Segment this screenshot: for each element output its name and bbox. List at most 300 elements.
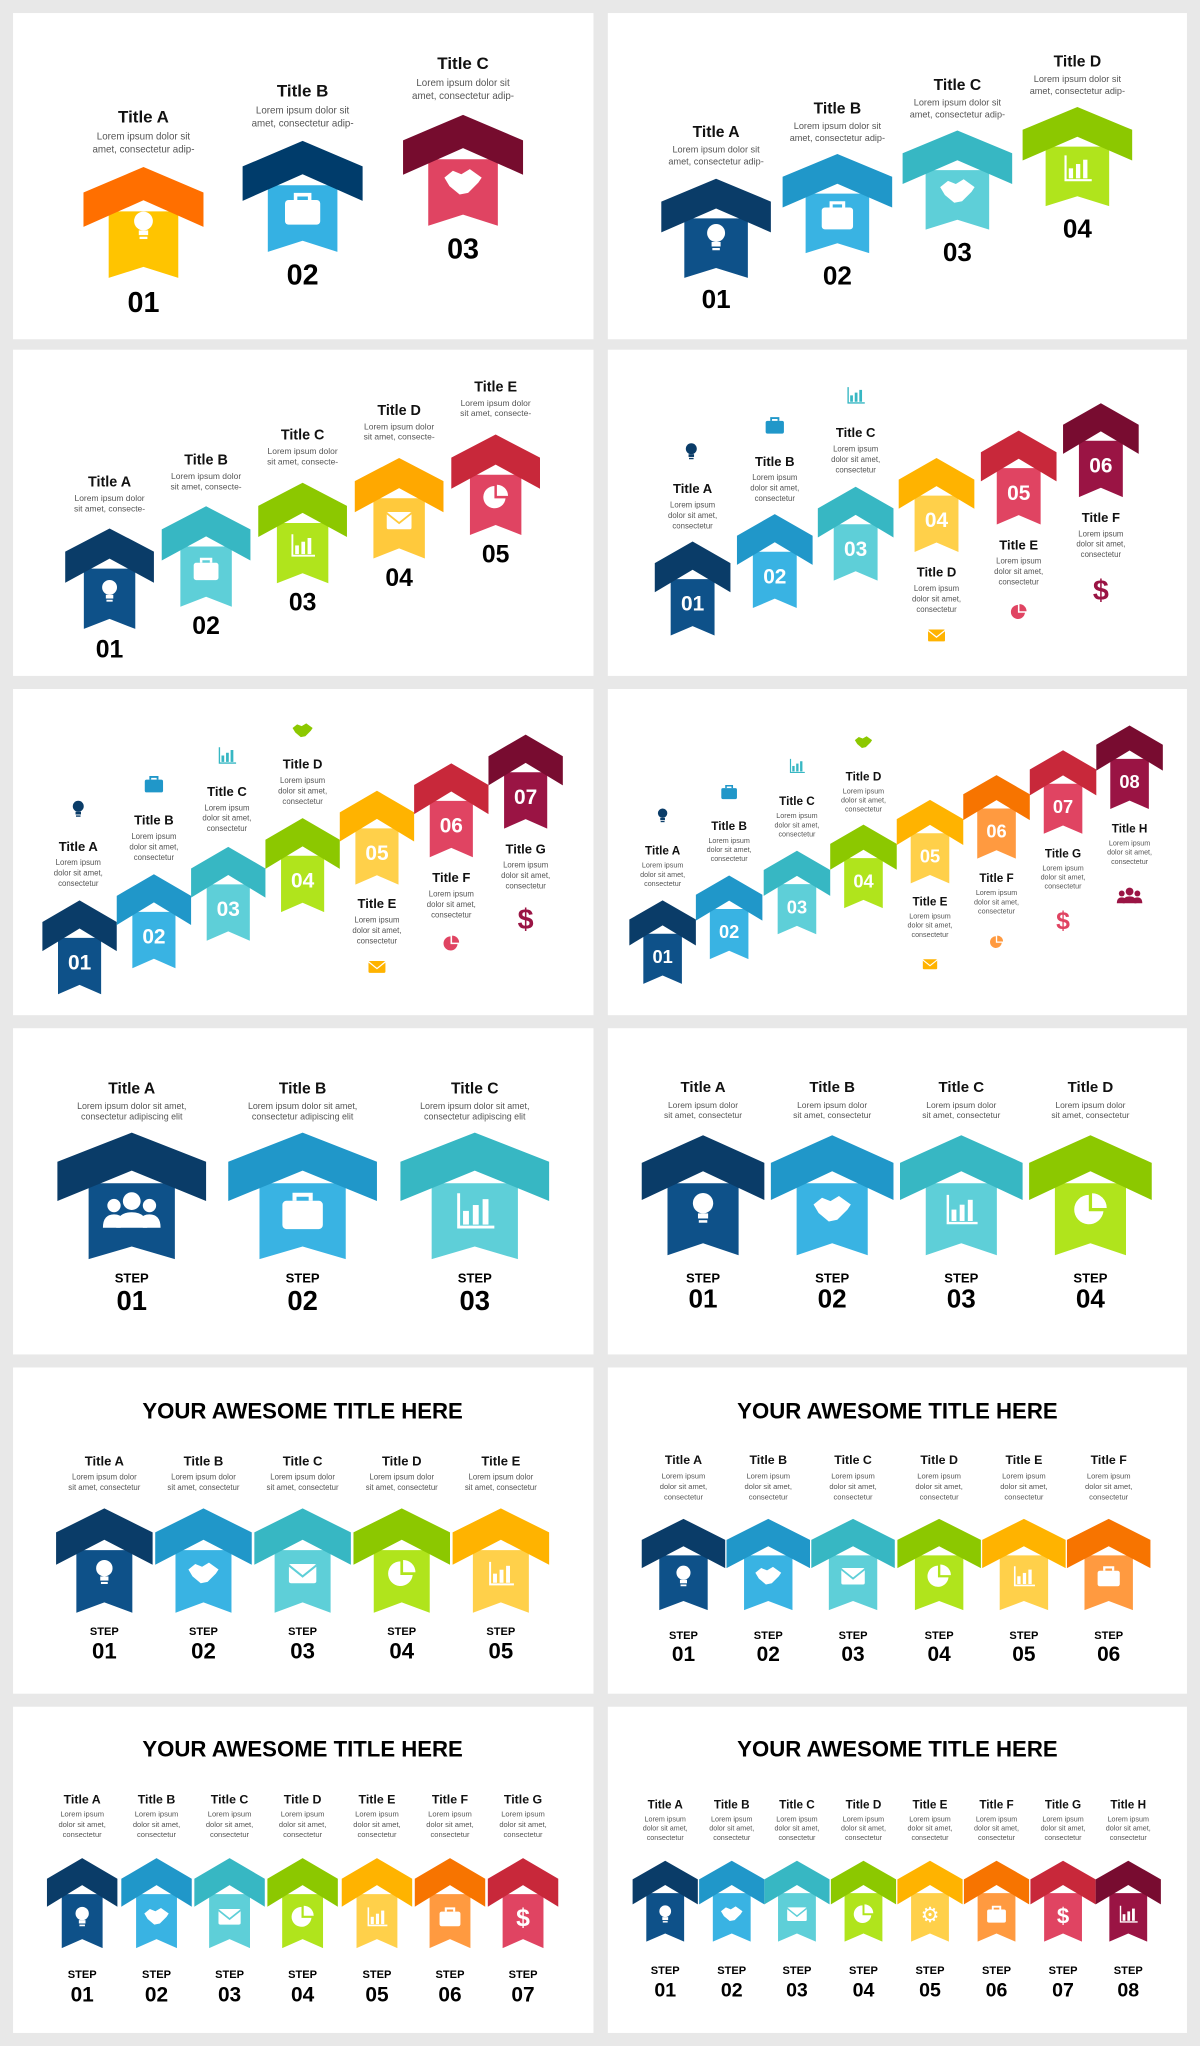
arrow 04 xyxy=(355,458,443,558)
labels panel 11: Lorem ipsum xyxy=(355,1809,399,1818)
heading: YOUR AWESOME TITLE HERE xyxy=(737,1736,1058,1761)
labels panel 10: consectetur xyxy=(834,1492,873,1501)
labels and icons panel 6: dolor sit amet, xyxy=(1107,849,1152,857)
arrow 04: 04 xyxy=(925,509,949,532)
labels panel 1: 02 xyxy=(287,259,319,291)
labels and icons panel 5: Title F xyxy=(432,870,470,885)
labels panel 8: Title B xyxy=(809,1079,855,1096)
arrow 02 xyxy=(243,141,363,252)
labels and icons panel 5: dolor sit amet, xyxy=(54,869,103,878)
labels and icons panel 4: consectetur xyxy=(835,465,876,474)
labels panel 11: 03 xyxy=(218,1984,241,2007)
labels panel 9: STEP xyxy=(90,1626,119,1638)
step 01 xyxy=(56,1508,153,1613)
arrow 03: 03 xyxy=(787,896,807,917)
labels panel 1: Title A xyxy=(118,108,169,127)
arrow 01: 01 xyxy=(681,593,705,616)
labels and icons panel 5: dolor sit amet, xyxy=(278,786,327,795)
labels panel 7: STEP xyxy=(115,1271,149,1286)
arrow 01 xyxy=(655,542,730,635)
step 05 xyxy=(897,1861,963,1942)
labels panel 1: Lorem ipsum dolor sit xyxy=(416,78,510,89)
labels and icons panel 4: Lorem ipsum xyxy=(833,444,878,453)
labels and icons panel 4: consectetur xyxy=(999,578,1039,587)
labels and icons panel 4: consectetur xyxy=(1081,550,1121,559)
labels panel 1: Lorem ipsum dolor sit xyxy=(256,106,350,117)
step 02 xyxy=(771,1135,893,1255)
labels panel 2: Lorem ipsum dolor sit xyxy=(914,98,1001,108)
labels panel 11: Lorem ipsum xyxy=(281,1809,324,1818)
labels panel 3: Title C xyxy=(281,428,324,444)
labels and icons panel 6: Title D xyxy=(846,770,881,783)
labels panel 2 xyxy=(668,54,1125,314)
labels panel 3: 03 xyxy=(289,590,316,617)
labels panel 3: Lorem ipsum dolor xyxy=(461,398,531,408)
labels panel 11: Title C xyxy=(211,1792,248,1806)
labels panel 3: Lorem ipsum dolor xyxy=(268,446,338,456)
labels panel 12: Title C xyxy=(779,1799,815,1812)
labels panel 8: 01 xyxy=(689,1283,718,1313)
labels panel 11: STEP xyxy=(68,1969,97,1981)
labels panel 10: dolor sit amet, xyxy=(1085,1482,1132,1491)
labels and icons panel 6: Title E xyxy=(913,896,948,909)
labels panel 11: dolor sit amet, xyxy=(133,1820,180,1829)
labels panel 12: 01 xyxy=(654,1979,676,2001)
labels panel 10: STEP xyxy=(1094,1630,1124,1642)
panel 11: title + seven step arrows xyxy=(13,1707,593,2033)
labels panel 12: STEP xyxy=(849,1965,879,1977)
labels panel 3: Lorem ipsum dolor xyxy=(75,493,145,503)
labels and icons panel 4: Lorem ipsum xyxy=(914,584,959,593)
labels panel 8: STEP xyxy=(686,1271,720,1286)
labels panel 9: Title B xyxy=(184,1453,223,1468)
labels panel 11: Title B xyxy=(138,1792,175,1806)
labels panel 7: STEP xyxy=(458,1271,492,1286)
labels panel 10: consectetur xyxy=(1089,1492,1129,1501)
labels panel 10: dolor sit amet, xyxy=(829,1482,877,1491)
labels panel 12: Title D xyxy=(846,1799,881,1812)
arrow 03: 03 xyxy=(844,538,867,561)
labels and icons panel 6: consectetur xyxy=(1045,883,1082,891)
labels panel 11: Title F xyxy=(432,1792,469,1806)
labels panel 9: 01 xyxy=(92,1638,117,1663)
labels panel 2: amet, consectetur adip- xyxy=(1030,86,1125,96)
step 02 xyxy=(699,1861,764,1942)
labels and icons panel 6: dolor sit amet, xyxy=(1041,873,1086,881)
step 02 xyxy=(121,1858,192,1948)
labels and icons panel 4 xyxy=(668,387,1125,641)
labels panel 11: 04 xyxy=(291,1984,315,2007)
labels panel 9: Lorem ipsum dolor xyxy=(72,1473,137,1482)
labels panel 9: Lorem ipsum dolor xyxy=(171,1473,236,1482)
labels panel 11: 06 xyxy=(438,1984,462,2007)
labels panel 12: Lorem ipsum xyxy=(1108,1816,1149,1824)
arrow 04 xyxy=(265,818,340,912)
labels and icons panel 4: consectetur xyxy=(755,494,795,503)
labels and icons panel 6: consectetur xyxy=(778,830,816,838)
labels panel 8: Lorem ipsum dolor xyxy=(926,1100,997,1110)
labels panel 11: 07 xyxy=(511,1984,535,2007)
arrow 01 xyxy=(629,900,696,984)
labels panel 7: STEP xyxy=(286,1271,320,1286)
labels panel 12: Lorem ipsum xyxy=(776,1816,818,1824)
labels panel 11: Title A xyxy=(64,1792,101,1806)
labels panel 10: Title B xyxy=(749,1453,787,1467)
labels panel 7: Title C xyxy=(451,1080,499,1097)
labels panel 10 xyxy=(660,1453,1132,1666)
labels panel 11: Lorem ipsum xyxy=(501,1809,545,1818)
labels panel 2: 03 xyxy=(943,237,972,267)
labels panel 8: 04 xyxy=(1076,1283,1105,1313)
step 08 xyxy=(1096,1861,1161,1942)
labels and icons panel 4: Title F xyxy=(1082,510,1120,525)
labels panel 3: Title E xyxy=(474,379,517,395)
arrow 02 xyxy=(162,506,250,607)
arrow 02: 02 xyxy=(763,565,786,588)
panel 10: title + six step arrows xyxy=(608,1367,1187,1694)
labels and icons panel 5: consectetur xyxy=(58,879,99,888)
labels panel 1: 01 xyxy=(128,287,159,319)
labels panel 7: Title A xyxy=(108,1080,155,1097)
labels and icons panel 4: Lorem ipsum xyxy=(670,501,715,510)
arrow 05 xyxy=(981,431,1057,525)
panel 4: six staircase arrows xyxy=(608,350,1187,676)
step 01 xyxy=(642,1519,725,1610)
labels and icons panel 6: Lorem ipsum xyxy=(1042,864,1084,872)
labels panel 2: Title A xyxy=(693,124,740,141)
labels and icons panel 4: dolor sit amet, xyxy=(1076,540,1125,549)
labels panel 10: 01 xyxy=(672,1643,695,1666)
labels panel 12: consectetur xyxy=(1045,1834,1082,1842)
arrow 06: 06 xyxy=(1089,454,1112,477)
labels panel 7: Lorem ipsum dolor sit amet, xyxy=(420,1101,529,1111)
arrow 05 xyxy=(340,791,414,885)
labels panel 12: dolor sit amet, xyxy=(1106,1825,1151,1833)
labels panel 12: consectetur xyxy=(778,1834,816,1842)
labels panel 3: Title B xyxy=(184,453,228,469)
labels panel 10: dolor sit amet, xyxy=(915,1482,963,1491)
labels and icons panel 5 xyxy=(54,723,550,973)
labels panel 10: STEP xyxy=(669,1630,699,1642)
labels panel 9: STEP xyxy=(189,1626,219,1638)
labels and icons panel 4: dolor sit amet, xyxy=(912,595,961,604)
labels panel 11: Lorem ipsum xyxy=(428,1809,472,1818)
labels and icons panel 6: Lorem ipsum xyxy=(776,812,818,820)
labels and icons panel 4: dolor sit amet, xyxy=(994,567,1043,576)
labels and icons panel 5: consectetur xyxy=(505,882,546,891)
labels panel 10: Title D xyxy=(920,1453,958,1467)
labels and icons panel 6: Title G xyxy=(1045,847,1081,860)
arrow 04 xyxy=(899,458,974,552)
labels panel 10: 03 xyxy=(841,1643,865,1666)
labels panel 1: Lorem ipsum dolor sit xyxy=(97,132,190,143)
labels panel 9: Lorem ipsum dolor xyxy=(369,1473,434,1482)
labels panel 12: consectetur xyxy=(1110,1834,1147,1842)
labels and icons panel 6: Title H xyxy=(1112,822,1147,835)
labels panel 11 xyxy=(58,1792,547,2007)
labels panel 12: 06 xyxy=(986,1979,1008,2001)
labels panel 11: consectetur xyxy=(357,1830,397,1839)
labels panel 11: dolor sit amet, xyxy=(353,1820,401,1829)
arrow 01: 01 xyxy=(68,951,92,975)
arrow 03 xyxy=(191,847,265,941)
step 01 xyxy=(642,1135,764,1255)
labels panel 12: consectetur xyxy=(845,1834,883,1842)
step 01 xyxy=(633,1861,698,1942)
labels and icons panel 5: Lorem ipsum xyxy=(503,861,548,870)
labels panel 12: Title G xyxy=(1045,1799,1081,1812)
step 02 xyxy=(155,1508,252,1613)
labels panel 9: STEP xyxy=(288,1626,318,1638)
labels and icons panel 5: consectetur xyxy=(134,853,174,862)
labels and icons panel 5: dolor sit amet, xyxy=(202,814,251,823)
labels panel 12: consectetur xyxy=(912,1834,949,1842)
labels panel 11: STEP xyxy=(142,1969,172,1981)
labels panel 8: sit amet, consectetur xyxy=(1051,1110,1130,1120)
step 04 xyxy=(1029,1135,1152,1255)
labels panel 8: Title D xyxy=(1068,1079,1113,1096)
arrow 06: 06 xyxy=(986,821,1007,842)
step 03 xyxy=(900,1135,1023,1255)
arrow 03: 03 xyxy=(217,898,240,921)
labels panel 12: 05 xyxy=(919,1979,941,2001)
labels panel 12: 02 xyxy=(721,1979,743,2001)
labels and icons panel 4: $ xyxy=(1093,575,1109,607)
labels panel 10: Lorem ipsum xyxy=(917,1471,961,1480)
panel 7: three step arrows xyxy=(13,1028,593,1354)
labels panel 11: consectetur xyxy=(210,1830,250,1839)
labels panel 3: Title A xyxy=(88,475,131,491)
arrow 06: 06 xyxy=(440,814,463,837)
labels panel 12: dolor sit amet, xyxy=(841,1825,886,1833)
labels panel 11: dolor sit amet, xyxy=(499,1820,547,1829)
labels panel 7: Lorem ipsum dolor sit amet, xyxy=(77,1101,186,1111)
labels and icons panel 5: dolor sit amet, xyxy=(501,871,550,880)
labels and icons panel 6: Lorem ipsum xyxy=(976,889,1017,897)
labels and icons panel 4: Lorem ipsum xyxy=(752,473,797,482)
labels and icons panel 4: dolor sit amet, xyxy=(668,511,717,520)
labels panel 10: Title A xyxy=(665,1453,702,1467)
arrow 03 xyxy=(818,487,893,581)
arrow 02 xyxy=(737,514,813,608)
labels panel 10: STEP xyxy=(925,1630,954,1642)
labels panel 2: Title C xyxy=(934,77,981,94)
labels and icons panel 6: dolor sit amet, xyxy=(707,846,752,854)
labels panel 1: amet, consectetur adip- xyxy=(252,119,354,130)
labels panel 12: 04 xyxy=(853,1979,874,2001)
arrow 06 xyxy=(1063,403,1139,497)
labels panel 7: 01 xyxy=(117,1285,147,1316)
labels panel 3: sit amet, consecte- xyxy=(74,503,145,514)
step 03 xyxy=(194,1858,265,1948)
labels and icons panel 5: Lorem ipsum xyxy=(204,803,250,812)
labels panel 11: dolor sit amet, xyxy=(426,1820,474,1829)
arrow 02: 02 xyxy=(142,925,166,948)
labels and icons panel 5: Title D xyxy=(283,757,322,772)
labels panel 2: amet, consectetur adip- xyxy=(790,133,885,143)
labels panel 12: Lorem ipsum xyxy=(909,1816,951,1824)
labels panel 8: sit amet, consectetur xyxy=(664,1110,742,1120)
step 03 xyxy=(400,1133,549,1259)
labels panel 11: Title D xyxy=(284,1792,321,1806)
labels panel 9: Lorem ipsum dolor xyxy=(270,1473,335,1482)
arrow 08: 08 xyxy=(1119,771,1140,792)
labels and icons panel 5: Title E xyxy=(358,896,397,911)
labels panel 12: 08 xyxy=(1117,1979,1139,2001)
labels panel 3: sit amet, consecte- xyxy=(267,457,338,467)
arrow 02: 02 xyxy=(719,921,739,942)
labels panel 7: Lorem ipsum dolor sit amet, xyxy=(248,1101,357,1111)
labels panel 7: consectetur adipiscing elit xyxy=(81,1112,183,1122)
labels panel 9: sit amet, consectetur xyxy=(68,1483,141,1492)
labels and icons panel 6: consectetur xyxy=(912,931,949,939)
labels panel 12: 07 xyxy=(1052,1979,1074,2001)
labels panel 10: Lorem ipsum xyxy=(662,1471,705,1480)
labels panel 2: 02 xyxy=(823,260,852,290)
labels panel 7: 03 xyxy=(460,1285,490,1316)
labels panel 11: consectetur xyxy=(137,1830,177,1839)
labels panel 11: STEP xyxy=(436,1969,465,1981)
labels panel 8: Title A xyxy=(681,1079,726,1096)
labels and icons panel 6: consectetur xyxy=(978,907,1016,915)
labels panel 12: Lorem ipsum xyxy=(645,1816,686,1824)
arrow 05: 05 xyxy=(365,842,389,865)
labels panel 11: consectetur xyxy=(63,1830,102,1839)
panel 6: eight staircase arrows xyxy=(608,689,1187,1015)
labels and icons panel 6: consectetur xyxy=(845,806,883,814)
labels panel 10: consectetur xyxy=(664,1492,703,1501)
labels panel 10: consectetur xyxy=(749,1492,788,1501)
step 03 xyxy=(254,1508,351,1613)
labels panel 10: STEP xyxy=(754,1630,783,1642)
labels panel 10: STEP xyxy=(839,1630,868,1642)
labels panel 12: STEP xyxy=(982,1965,1012,1977)
panel 12: title + eight step arrows xyxy=(608,1707,1187,2033)
arrow 05: 05 xyxy=(920,846,940,867)
labels panel 12: STEP xyxy=(782,1965,812,1977)
arrow 07: 07 xyxy=(1053,796,1073,817)
labels and icons panel 5: Lorem ipsum xyxy=(429,889,474,898)
labels panel 10: Lorem ipsum xyxy=(1087,1471,1131,1480)
labels panel 2: amet, consectetur adip- xyxy=(910,109,1005,119)
labels panel 8: Lorem ipsum dolor xyxy=(1055,1100,1126,1110)
labels and icons panel 6: Lorem ipsum xyxy=(1109,840,1150,848)
arrow 07: 07 xyxy=(514,786,537,809)
step 02 xyxy=(228,1133,377,1259)
labels panel 1 xyxy=(92,54,514,319)
labels and icons panel 6: Lorem ipsum xyxy=(909,913,951,921)
heading: YOUR AWESOME TITLE HERE xyxy=(737,1398,1058,1423)
labels panel 8: Title C xyxy=(939,1079,984,1096)
labels panel 12: Lorem ipsum xyxy=(843,1816,884,1824)
labels panel 1: amet, consectetur adip- xyxy=(92,145,194,156)
labels panel 8: STEP xyxy=(1073,1271,1108,1286)
arrow 06 xyxy=(963,775,1030,859)
arrow 04 xyxy=(1023,107,1132,206)
labels panel 12: consectetur xyxy=(713,1834,751,1842)
labels panel 3: 01 xyxy=(96,637,124,664)
labels panel 2: Lorem ipsum dolor sit xyxy=(672,145,760,155)
labels panel 9: 02 xyxy=(191,1638,216,1663)
labels and icons panel 4: Title C xyxy=(836,425,876,440)
labels panel 8: STEP xyxy=(944,1271,979,1286)
arrow 01 xyxy=(83,167,203,278)
panel 5: seven staircase arrows xyxy=(13,689,593,1015)
labels and icons panel 5: Lorem ipsum xyxy=(354,916,400,925)
arrow 03 xyxy=(403,115,523,226)
labels panel 8: sit amet, consectetur xyxy=(793,1110,871,1120)
labels panel 1: Title B xyxy=(277,82,328,101)
labels panel 9: sit amet, consectetur xyxy=(167,1483,240,1492)
labels and icons panel 5: consectetur xyxy=(207,824,248,833)
labels and icons panel 6: dolor sit amet, xyxy=(974,898,1019,906)
labels panel 10: dolor sit amet, xyxy=(660,1482,707,1491)
labels panel 10: Title E xyxy=(1005,1453,1042,1467)
labels and icons panel 6: Lorem ipsum xyxy=(708,837,750,845)
step 03 xyxy=(811,1519,895,1610)
labels panel 11: Lorem ipsum xyxy=(135,1809,178,1818)
labels and icons panel 6: consectetur xyxy=(644,880,682,888)
labels panel 8: sit amet, consectetur xyxy=(922,1110,1001,1120)
labels and icons panel 6 xyxy=(640,736,1152,969)
labels panel 11: STEP xyxy=(509,1969,538,1981)
arrow 01 xyxy=(65,528,154,629)
labels panel 9: sit amet, consectetur xyxy=(366,1483,438,1492)
arrow 02 xyxy=(117,874,191,968)
labels and icons panel 5: dolor sit amet, xyxy=(129,842,178,851)
arrow 01 xyxy=(42,900,117,994)
labels panel 12: dolor sit amet, xyxy=(1041,1825,1086,1833)
labels and icons panel 4: consectetur xyxy=(916,605,957,614)
step 06 xyxy=(964,1861,1029,1942)
labels panel 2: amet, consectetur adip- xyxy=(668,156,764,166)
labels and icons panel 4: consectetur xyxy=(672,521,713,530)
labels panel 12: Title F xyxy=(979,1799,1014,1812)
arrow 03 xyxy=(764,851,830,934)
labels panel 7 xyxy=(77,1080,529,1316)
labels panel 12: Lorem ipsum xyxy=(711,1816,752,1824)
labels panel 11: Title E xyxy=(358,1792,395,1806)
labels panel 9: 03 xyxy=(290,1638,315,1663)
arrow 05 xyxy=(451,435,540,535)
labels and icons panel 6: dolor sit amet, xyxy=(841,796,886,804)
labels panel 12: dolor sit amet, xyxy=(908,1825,952,1833)
labels and icons panel 4: Title E xyxy=(999,537,1038,552)
labels panel 11: consectetur xyxy=(504,1830,543,1839)
labels panel 10: STEP xyxy=(1009,1630,1039,1642)
labels and icons panel 6: Lorem ipsum xyxy=(843,787,884,795)
labels panel 10: Lorem ipsum xyxy=(831,1471,875,1480)
step 07: $ xyxy=(1057,1903,1070,1928)
labels panel 12: Title E xyxy=(913,1799,948,1812)
labels and icons panel 6: Title F xyxy=(979,872,1014,885)
step 07: $ xyxy=(516,1905,530,1932)
heading: YOUR AWESOME TITLE HERE xyxy=(142,1736,463,1761)
labels panel 10: 05 xyxy=(1012,1643,1036,1666)
labels and icons panel 6: dolor sit amet, xyxy=(908,922,952,930)
labels panel 3: Lorem ipsum dolor xyxy=(171,471,241,481)
labels panel 9: Title A xyxy=(85,1453,124,1468)
labels panel 9: Lorem ipsum dolor xyxy=(469,1473,534,1482)
labels and icons panel 5: Lorem ipsum xyxy=(56,858,101,867)
labels panel 8: Lorem ipsum dolor xyxy=(797,1100,867,1110)
step 04 xyxy=(353,1508,450,1613)
labels panel 12: Title B xyxy=(714,1799,750,1812)
arrow 03 xyxy=(258,483,347,583)
labels panel 1: Title C xyxy=(437,54,489,73)
labels and icons panel 4: Title D xyxy=(917,565,956,580)
labels panel 9: Title C xyxy=(283,1453,323,1468)
